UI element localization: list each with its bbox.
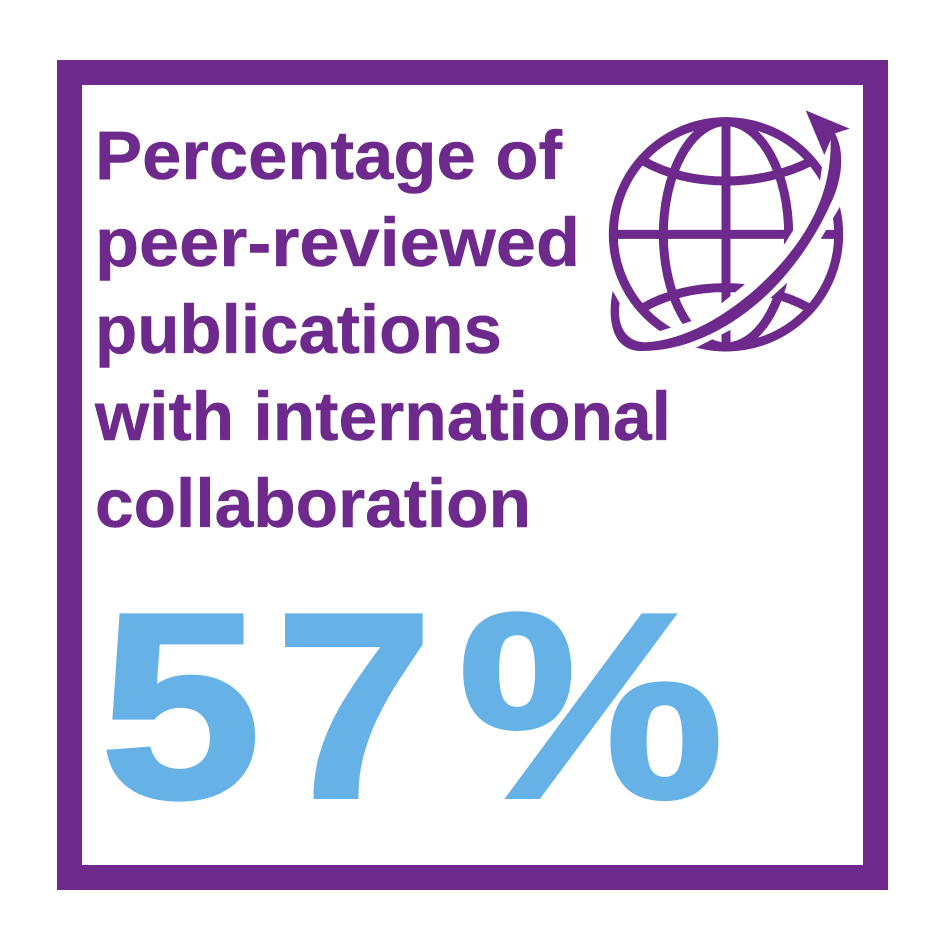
- statistic: 57%: 7: [275, 558, 433, 853]
- icon: globe with orbiting arrow: [611, 110, 857, 358]
- statistic: 57%: [100, 558, 724, 853]
- panel: purple border frame: [70, 72, 876, 878]
- orbit gap: [623, 158, 857, 358]
- orbit swoosh with arrowhead: [611, 110, 850, 351]
- heading: percentage of peer-reviewed publications with international collaboration: with international: [94, 378, 671, 455]
- statistic: 57%: %: [458, 558, 724, 853]
- statistic: 57%: 5: [100, 558, 261, 853]
- heading: percentage of peer-reviewed publications with international collaboration: peer-reviewed: [95, 204, 580, 281]
- heading: percentage of peer-reviewed publications with international collaboration: publications: [95, 291, 502, 368]
- heading: percentage of peer-reviewed publications with international collaboration: collaboration: [95, 465, 531, 542]
- heading: percentage of peer-reviewed publications with international collaboration: [94, 117, 671, 542]
- heading: percentage of peer-reviewed publications with international collaboration: Percentage of: [95, 117, 563, 194]
